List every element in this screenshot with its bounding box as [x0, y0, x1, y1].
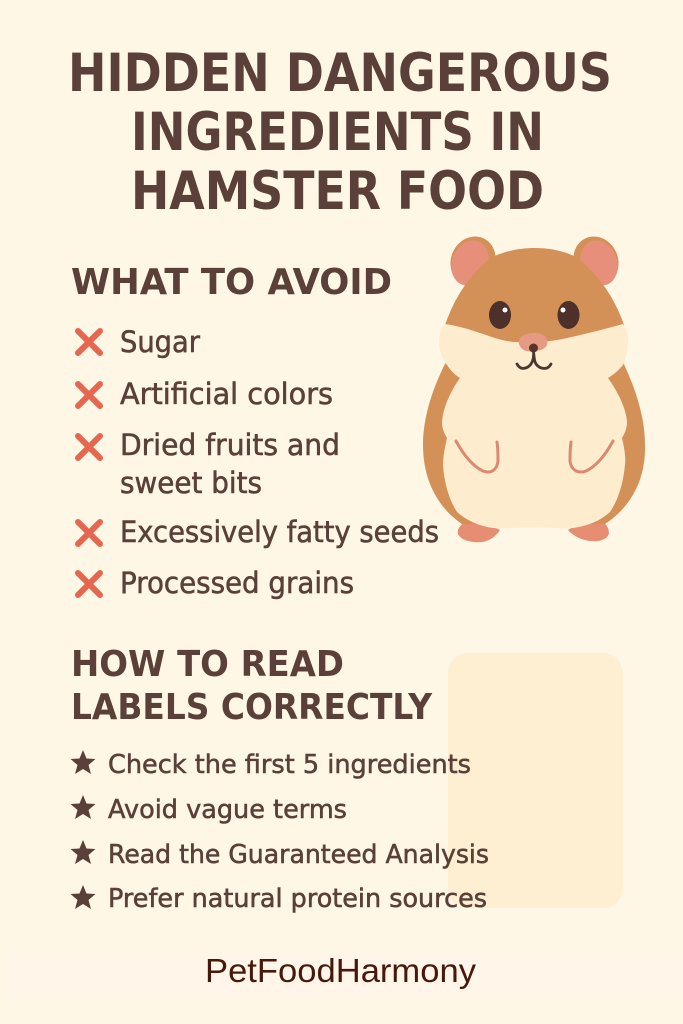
item: dried fruits and sweet bits	[78, 428, 340, 500]
icon: hamster illustration	[423, 229, 645, 542]
paws	[456, 441, 498, 472]
title	[68, 43, 612, 222]
body	[423, 360, 645, 524]
feet	[458, 520, 500, 542]
title: HIDDEN DANGEROUS	[68, 43, 612, 104]
item: natural protein sources: Prefer natural protein sources	[108, 884, 487, 914]
item: sugar: Sugar	[120, 325, 200, 359]
heading: how to read labels correctly: LABELS CORRECTLY	[71, 687, 433, 728]
item: avoid vague terms: Avoid vague terms	[108, 795, 347, 825]
cheeks and belly	[439, 324, 628, 528]
heading: how to read labels correctly	[71, 644, 433, 728]
heading: what to avoid: WHAT TO AVOID	[71, 262, 392, 303]
item: dried fruits and sweet bits: Dried fruits and	[120, 428, 340, 462]
title: HAMSTER FOOD	[131, 161, 544, 222]
item: processed grains: Processed grains	[120, 566, 354, 600]
list: how to read labels	[70, 750, 489, 914]
left ear	[442, 229, 504, 293]
eyes	[489, 301, 580, 329]
footer band	[6, 953, 683, 997]
footer brand: PetFoodHarmony	[205, 952, 477, 989]
item: first 5 ingredients: Check the first 5 ingredients	[108, 750, 471, 780]
item: guaranteed analysis: Read the Guaranteed Analysis	[108, 840, 489, 870]
mouth	[517, 351, 551, 368]
nose	[519, 333, 547, 351]
item: sugar	[78, 325, 200, 359]
list: what to avoid	[78, 325, 439, 600]
item: dried fruits and sweet bits: sweet bits	[120, 466, 262, 500]
item: artificial colors: Artificial colors	[120, 377, 333, 411]
title: INGREDIENTS IN	[131, 102, 544, 163]
heading: how to read labels correctly: HOW TO READ	[71, 644, 344, 685]
right ear	[565, 229, 627, 293]
item: excessively fatty seeds: Excessively fatty seeds	[120, 515, 439, 549]
label panel: pale rounded rectangle	[448, 653, 623, 908]
head	[445, 248, 624, 345]
